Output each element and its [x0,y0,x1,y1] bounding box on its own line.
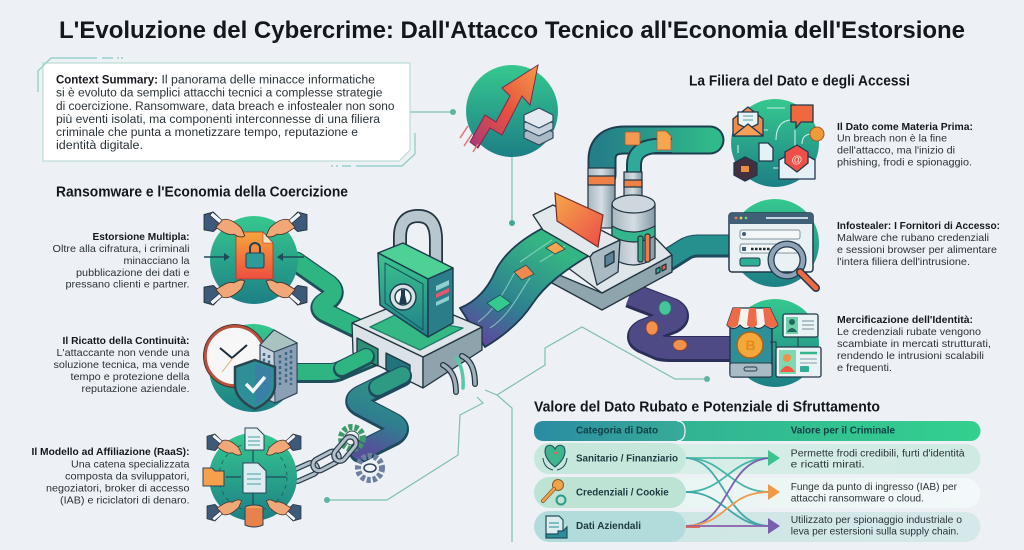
icon: key [543,480,566,504]
text: estorsione multipla [52,231,190,290]
icon: identity market [727,299,821,387]
icon: multiple extortion [204,212,307,305]
row labels: Credenziali / Cookie [576,487,669,499]
text: ricatto della continuità: Il Ricatto della Continuità: [62,335,190,347]
heading: valore: Valore del Dato Rubato e Potenziale di Sfruttamento [534,399,880,416]
text: modello ad affiliazione: Il Modello ad Affiliazione (RaaS): [32,446,190,458]
padlock server [342,216,482,392]
text: modello ad affiliazione: composta da sviluppatori, [65,471,190,483]
table: stolen data value [534,421,980,542]
connectors [342,356,475,392]
context summary text: identità digitale. [56,140,143,152]
conveyor belts: right side [630,245,735,349]
value text: leva per estersioni sulla supply chain. [791,526,959,538]
text: modello ad affiliazione [32,446,190,507]
central conveyor [460,228,590,347]
flow arrows [768,450,780,534]
text: modello ad affiliazione: Una catena specializzata [71,459,190,471]
context summary text: criminale che punta a monetizzare tempo, reputazione e [56,127,358,139]
text: ricatto della continuità: reputazione aziendale. [82,383,190,395]
icon: identity market: B [746,337,756,353]
text: ricatto della continuità [54,335,190,395]
context summary text: di coercizione. Ransomware, data breach e infostealer non sono [56,101,394,113]
text: estorsione multipla: pubblicazione dei dati e [76,267,190,279]
belt tiles [487,242,565,312]
text: mercificazione: Mercificazione dell'Identità: [837,314,973,326]
server platform [352,298,482,388]
row labels [576,453,678,532]
machine body [533,205,666,285]
pipes [602,140,710,176]
row backgrounds [534,443,980,542]
heading: ransomware: Ransomware e l'Economia della Coercizione [56,184,348,200]
value text: Permette frodi credibili, furti d'identità [791,447,965,459]
shackle [400,216,436,268]
text: dato come materia prima: Un breach non è la fine [837,133,947,145]
text: mercificazione: e frequenti. [837,362,892,374]
text: estorsione multipla: Estorsione Multipla: [92,231,190,243]
text: mercificazione [837,314,991,374]
icon: company documents [546,516,567,538]
icon: chain and gears [289,427,382,483]
icon: affiliate model [203,428,301,527]
icon: raw data: @ [792,154,802,166]
text: mercificazione: rendendo le intrusioni scalabili [837,350,984,362]
text: infostealer [837,220,1000,268]
text: ricatto della continuità: L'attaccante non vende una [56,347,190,359]
text: infostealer: e sessioni browser per alimentare [837,244,997,256]
row labels: Dati Aziendali [576,520,641,532]
value text: Utilizzato per spionaggio industriale o [791,514,962,526]
icon: clock, building and shield [204,324,297,412]
icon: raw data [731,99,824,187]
text: estorsione multipla: Oltre alla cifratura, i criminali [52,243,190,255]
value text [791,447,965,538]
table header [534,421,980,441]
flow lines [686,458,770,527]
table header: Valore per il Criminale [791,425,895,437]
heading: filiera: La Filiera del Dato e degli Accessi [689,74,910,90]
text: ricatto della continuità: tempo e protezione della [70,371,190,383]
table header: Categoria di Dato [576,425,658,437]
conveyor belts: left side [296,261,402,452]
text: dato come materia prima: phishing, frodi e spionaggio. [837,157,972,169]
title: L'Evoluzione del Cybercrime: Dall'Attacco Tecnico all'Economia dell'Estorsione [59,17,965,44]
context summary text: Il panorama delle minacce informatiche [162,74,375,86]
machine base plate [552,222,672,310]
text: infostealer: Infostealer: I Fornitori di Accesso: [837,220,1000,232]
context summary text: Context Summary: [56,74,158,86]
coins on belt [646,301,687,350]
text: modello ad affiliazione: negoziatori, broker di accesso [46,483,190,495]
pipe documents [625,131,671,150]
icon: heart in hands [543,445,567,470]
context summary text [56,74,394,152]
text: dato come materia prima: dell'attacco, ma l'inizio di [837,145,955,157]
leader lines [324,109,710,542]
icon: login window and magnifier [729,199,819,288]
value text: attacchi ransomware o cloud. [791,492,924,504]
text: ricatto della continuità: soluzione tecnica, ma vende [54,359,190,371]
text: dato come materia prima: Il Dato come Materia Prima: [837,121,973,133]
safe body [378,243,453,337]
row labels: Sanitario / Finanziario [576,453,678,465]
text: modello ad affiliazione: (IAB) e riciclatori di denaro. [60,495,190,507]
value text: e ricatti mirati. [791,459,865,471]
context summary text: si è evoluto da semplici attacchi tecnici a complesse strategie [56,88,382,100]
machine: data refinery [460,131,710,347]
context summary text: più eventi isolati, ma componenti interconnesse di una filiera [56,114,381,126]
text: infostealer: Malware che rubano credenziali [837,232,989,244]
text: estorsione multipla: pressano clienti e partner. [66,278,190,290]
icon: rising arrow and data stack [460,65,558,157]
text: mercificazione: scambiate in mercati strutturati, [837,338,991,350]
column and cylinder [588,168,655,265]
text: dato come materia prima [837,121,973,169]
value text: Funge da punto di ingresso (IAB) per [791,481,957,493]
text: estorsione multipla: minacciano la [124,255,190,267]
orange card [555,193,603,247]
text: mercificazione: Le credenziali rubate vengono [837,326,981,338]
panel: context summary [38,58,415,166]
text: infostealer: l'intera filiera dell'intrusione. [837,256,970,268]
